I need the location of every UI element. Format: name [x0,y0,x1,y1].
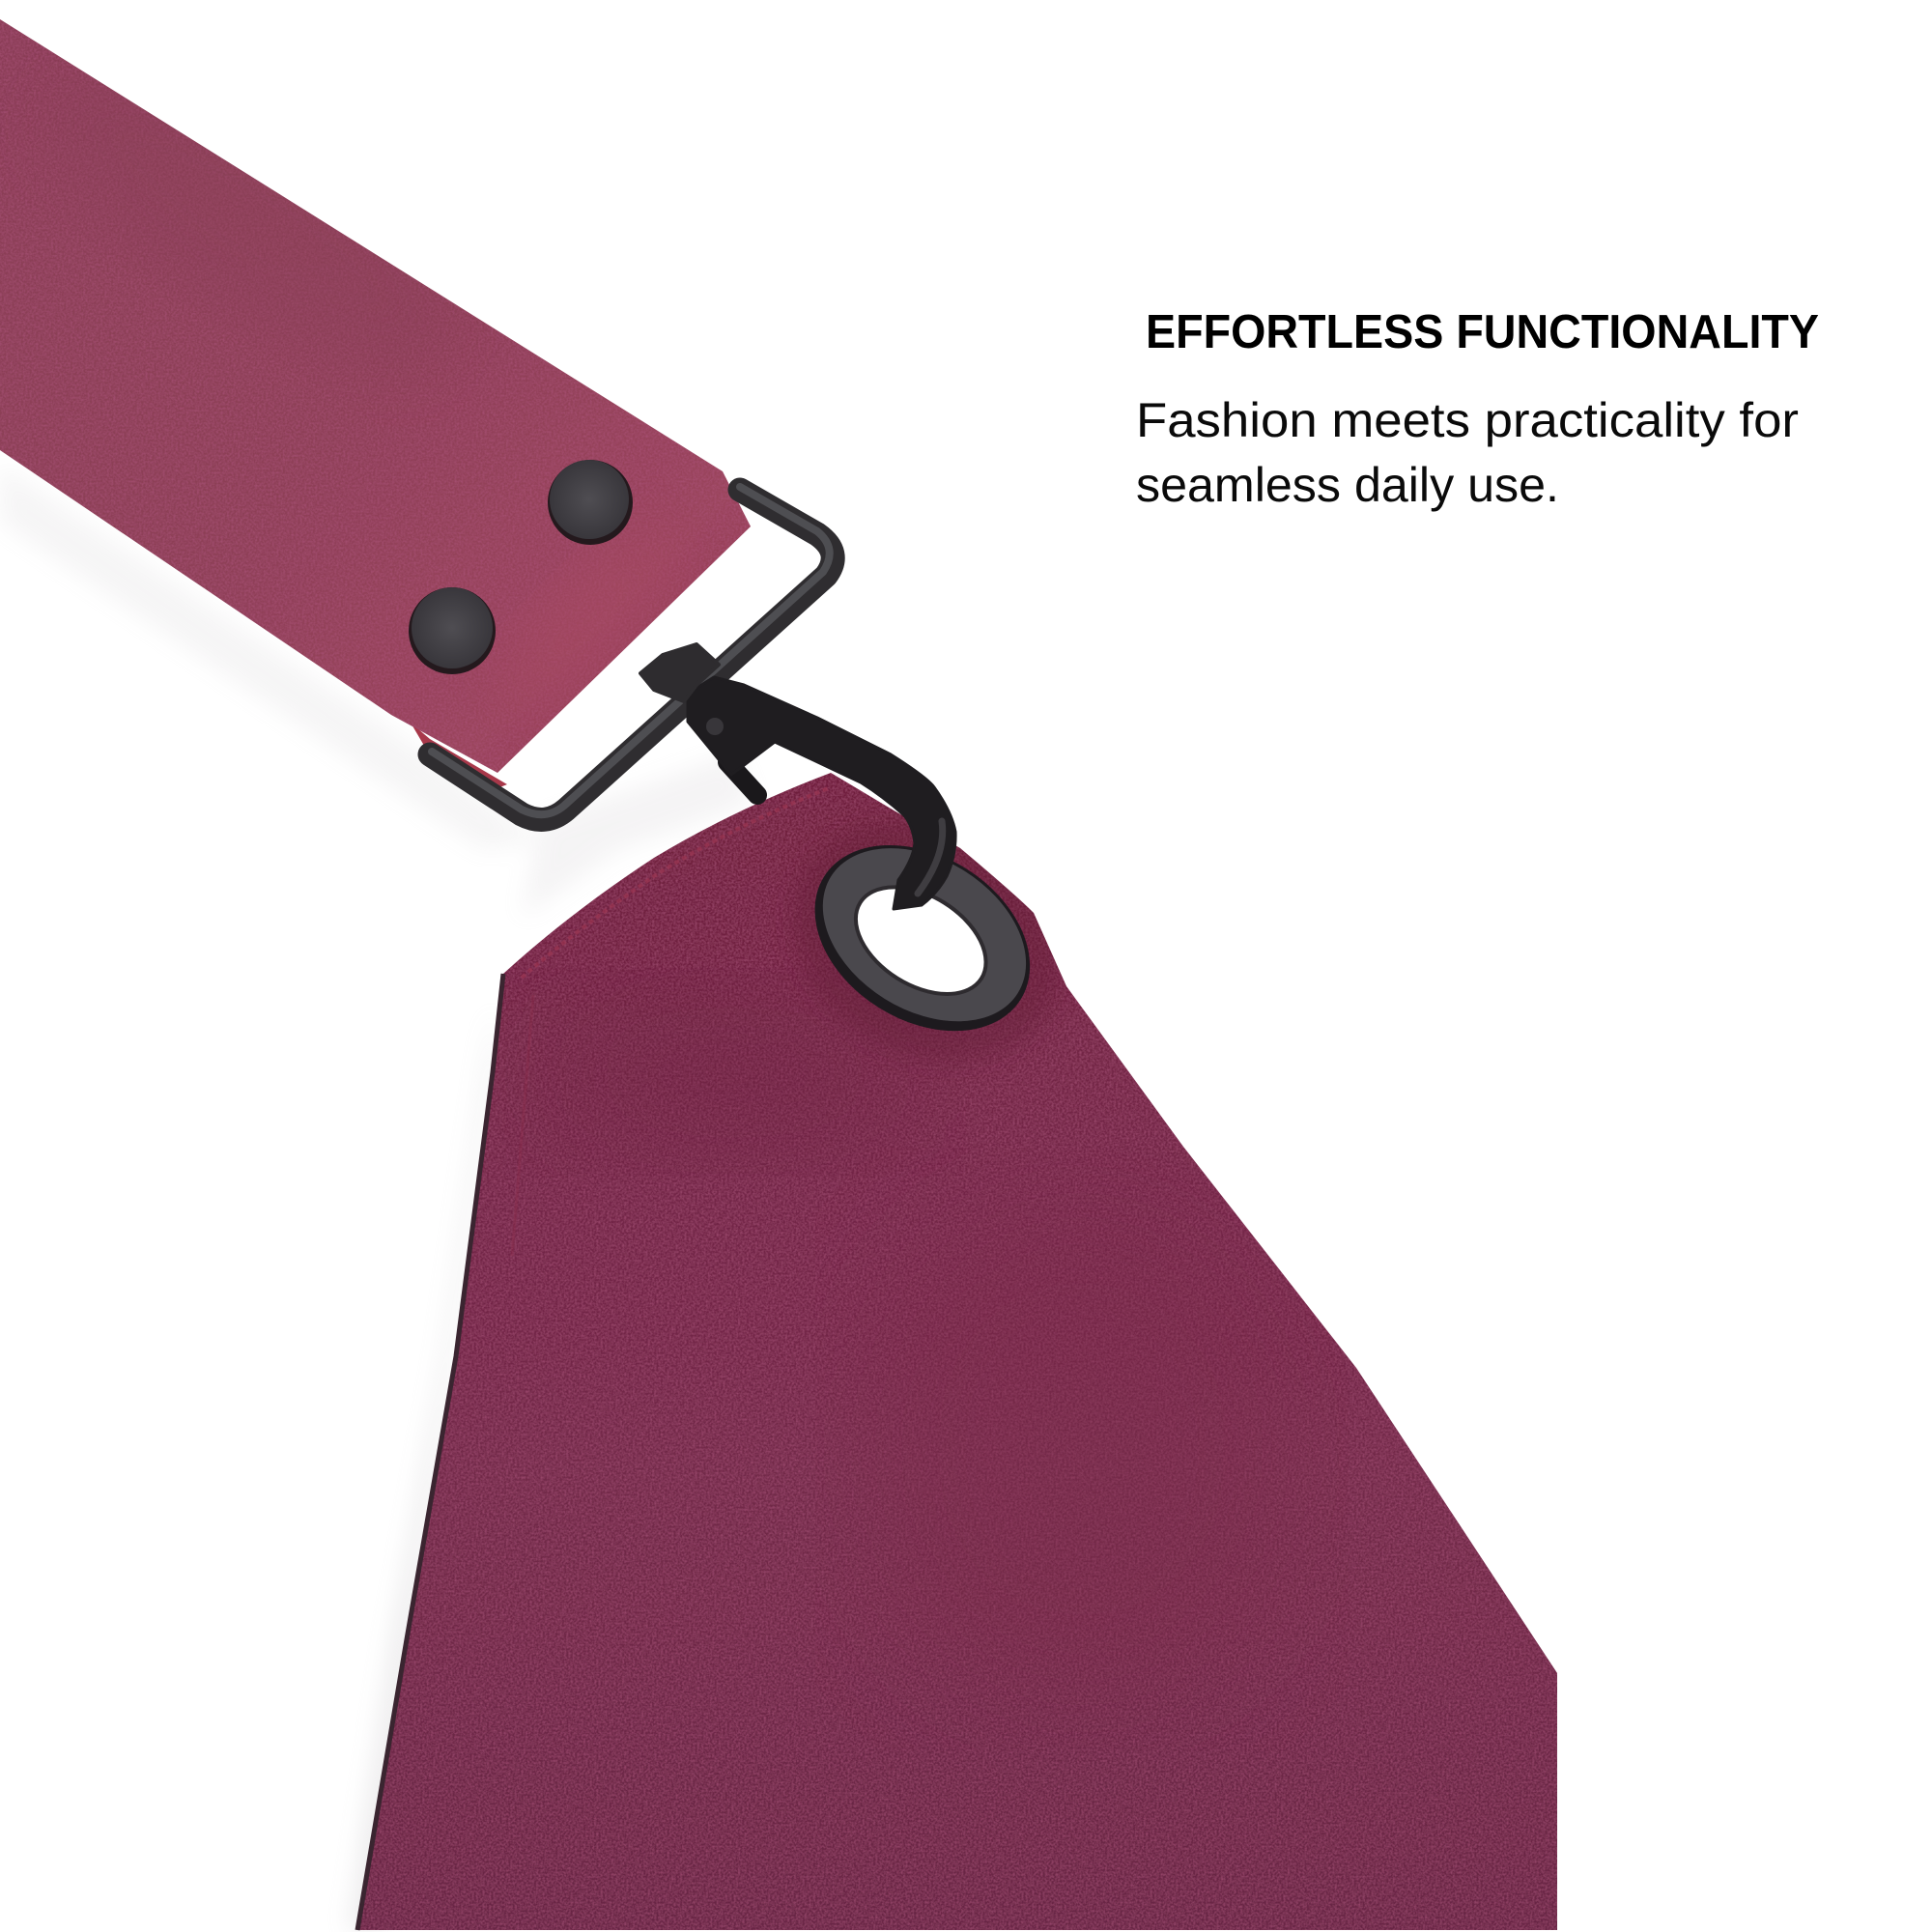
body text: Fashion meets practicality for [1136,393,1799,447]
body text: seamless daily use. [1136,458,1559,512]
hook arm [688,677,955,909]
rectangular buckle ring [430,487,833,819]
soft shadows under product [0,464,753,1930]
strap body [0,19,751,773]
fabric tone variation [512,776,1304,1700]
fabric panel [357,773,1557,1930]
hook gate [727,762,757,795]
body text [1136,393,1799,512]
fabric body [357,773,1557,1930]
rivet bottom [409,587,496,674]
hook barrel [640,644,719,701]
strap underlayer fold [411,723,507,792]
hook pivot [706,718,724,735]
strap [0,19,751,792]
swivel hook [640,644,955,909]
grommet [781,807,1065,1069]
heading: EFFORTLESS FUNCTIONALITY [1146,306,1819,358]
strap tone variation [9,25,712,741]
hook arm highlight [918,821,943,894]
rivet top [548,460,633,545]
left dark edge [357,974,503,1930]
